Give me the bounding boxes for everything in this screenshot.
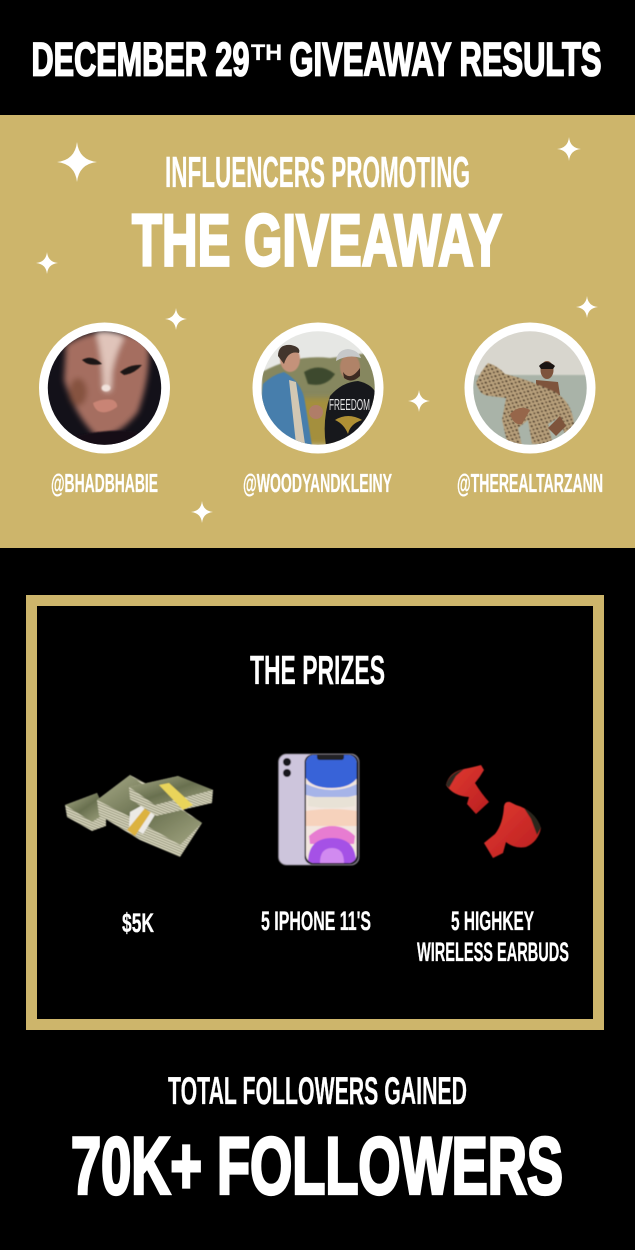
- avatar: woodyandkleiny: [252, 322, 384, 454]
- handle: woodyandkleiny: @WOODYANDKLEINY: [243, 468, 392, 498]
- panel: influencers: [0, 115, 635, 548]
- prize label: iphones: 5 IPHONE 11'S: [261, 906, 371, 936]
- icon: stacks of money: [65, 775, 213, 857]
- avatar: therealtarzann: [464, 322, 596, 454]
- prize label: cash: $5K: [122, 908, 154, 938]
- prizes heading: THE PRIZES: [250, 647, 385, 693]
- title: DECEMBER 29: [32, 32, 250, 86]
- panel: prizes: [32, 600, 598, 1024]
- prize label: earbuds: [417, 906, 569, 967]
- sweater lettering: FREEDOM: [329, 397, 370, 414]
- icon: iphone 11: [278, 754, 359, 865]
- title: TH: [251, 40, 282, 65]
- avatar: bhadbhabie: [39, 322, 170, 454]
- prize label: earbuds: 5 HIGHKEY: [451, 906, 534, 936]
- decorative sparkles: [36, 137, 598, 523]
- icon: wireless earbuds: [446, 765, 541, 858]
- handle: bhadbhabie: @BHADBHABIE: [51, 468, 158, 498]
- title: [32, 32, 602, 86]
